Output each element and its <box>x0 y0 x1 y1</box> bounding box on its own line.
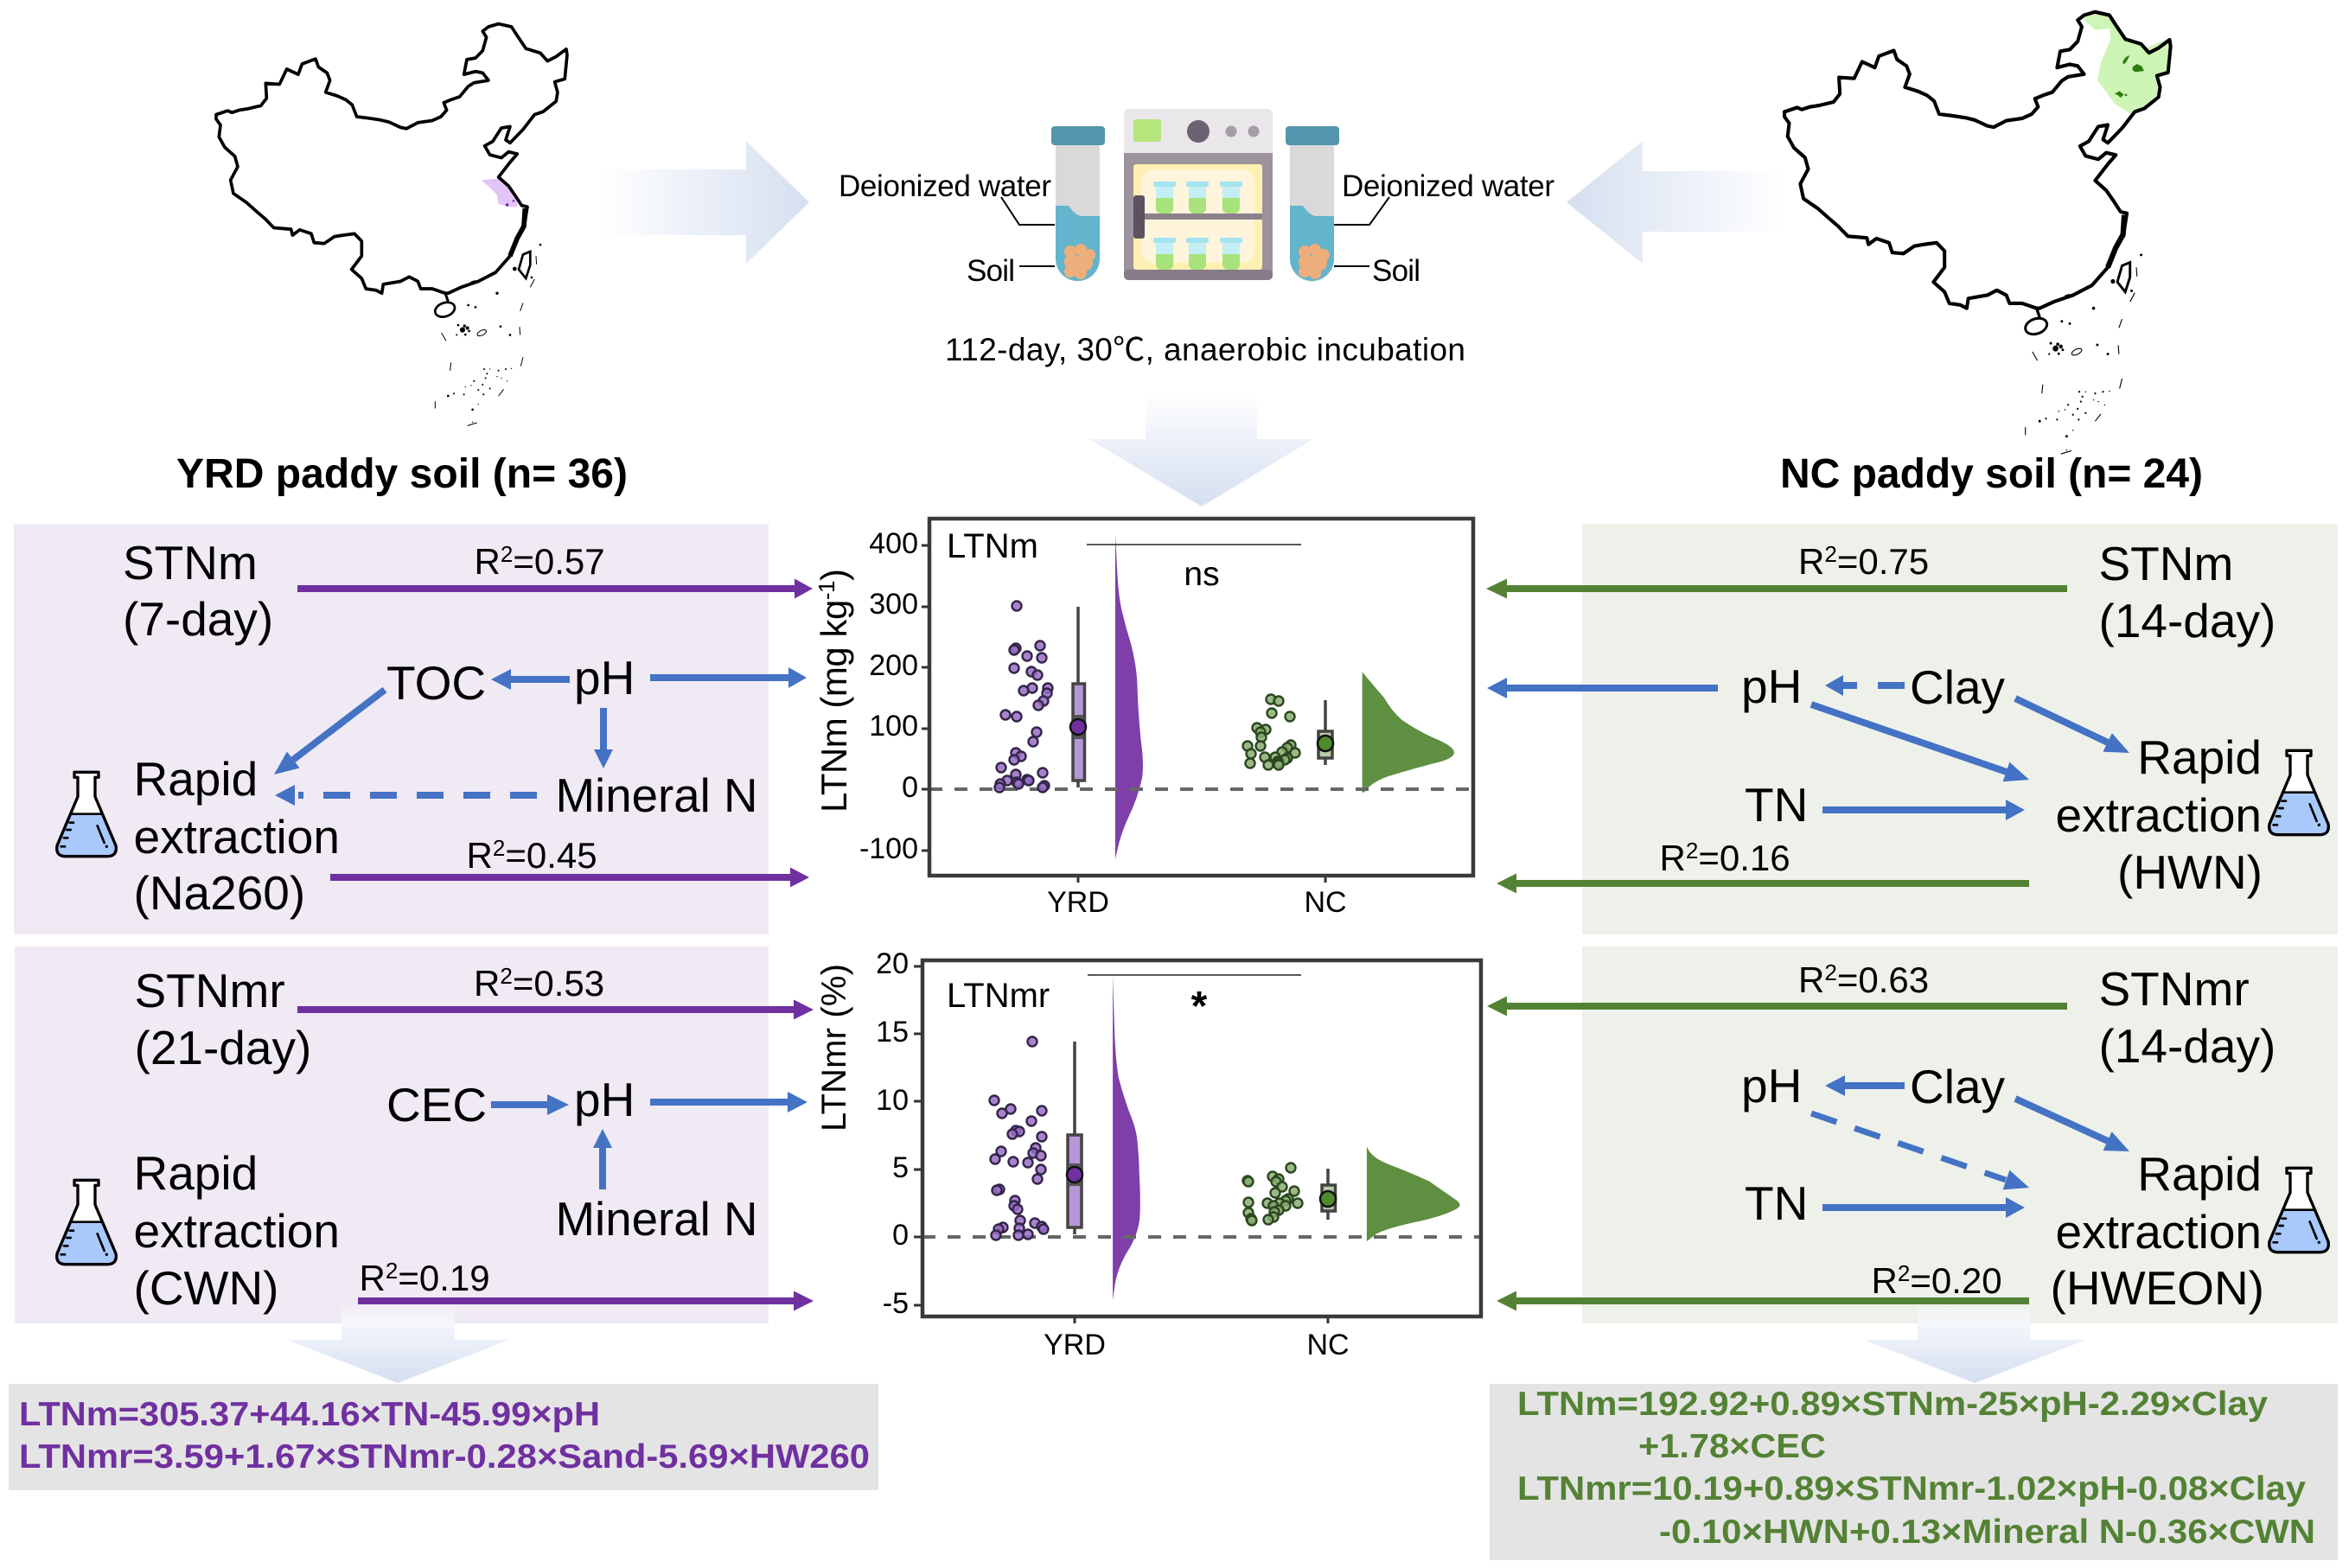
panel: NC STNmr path <box>1487 947 2338 1323</box>
arrow: STNmr to LTNmr <box>1487 996 2067 1017</box>
arrow: incubation to charts <box>1089 392 1313 507</box>
text: R2 0.45: 2 <box>493 835 505 861</box>
arrow: Clay to pH <box>1825 1075 1905 1096</box>
arrow: pH to rapid extraction <box>1811 704 2029 781</box>
text: R2 0.16: 2 <box>1686 838 1698 864</box>
text: STNmr 21-day: (21-day) <box>135 1021 311 1074</box>
text: R2 0.63: R <box>1798 959 1824 1000</box>
x labels: YRD <box>1047 886 1109 919</box>
text: STNmr 21-day <box>135 964 311 1074</box>
text: Mineral N: Mineral N <box>555 1192 757 1246</box>
significance label: ns <box>1184 556 1220 593</box>
map: China with YRD region <box>216 24 567 425</box>
label: deionized water right: Deionized water <box>1342 169 1554 203</box>
box: NC <box>1320 1169 1336 1220</box>
text: rapid extraction HWEON <box>2051 1147 2264 1315</box>
heading: YRD paddy soil: YRD paddy soil (n= 36) <box>176 451 628 497</box>
y tick labels: 0 <box>892 1219 909 1252</box>
text: pH: pH <box>1741 660 1802 713</box>
label: incubation conditions: 112-day, 30℃, anaerobic incubation <box>945 332 1465 367</box>
arrow: rapid extraction to LTNmr <box>358 1291 814 1310</box>
half violin: NC <box>1367 1146 1460 1241</box>
frame <box>929 519 1473 876</box>
icon: incubator <box>1124 109 1273 280</box>
arrow: YRD soil to incubation <box>599 141 809 264</box>
text: R2 0.57: =0.57 <box>513 541 605 582</box>
text: pH: pH <box>574 651 635 704</box>
y tick labels: -100 <box>859 832 918 865</box>
arrow: NC soil to incubation <box>1567 141 1783 264</box>
text: R2 0.20: 2 <box>1898 1260 1910 1286</box>
arrow: STNm to LTNm <box>1486 579 2067 598</box>
points: YRD <box>994 602 1053 792</box>
significance bracket <box>1088 974 1301 976</box>
arrow: TN to rapid extraction <box>1822 1197 2025 1218</box>
arrow: STNm to LTNm <box>297 579 813 598</box>
axis title: -1 <box>814 581 839 600</box>
map: China with NC region <box>1784 12 2171 454</box>
y tick labels: -5 <box>883 1287 909 1320</box>
text: TOC: TOC <box>386 656 486 710</box>
box: YRD <box>1067 1042 1082 1234</box>
text: rapid extraction HWN: Rapid <box>2137 730 2262 784</box>
text: pH: pH <box>1741 1059 1802 1112</box>
text: R2 0.75: 2 <box>1824 541 1837 567</box>
text: R2 0.63: 2 <box>1824 959 1837 985</box>
arrow: YRD to formula <box>287 1303 509 1383</box>
text: rapid extraction HWN <box>2056 730 2263 899</box>
box: YRD <box>1070 607 1086 787</box>
chart: LTNmr raincloud <box>815 947 1481 1361</box>
arrow: rapid extraction to LTNmr <box>1497 1291 2029 1310</box>
text: rapid extraction CWN <box>133 1146 340 1315</box>
x labels: NC <box>1304 886 1347 919</box>
text: rapid extraction CWN: Rapid <box>133 1146 258 1200</box>
text: R2 0.75: =0.75 <box>1837 541 1929 582</box>
arrow: TN to rapid extraction <box>1822 800 2025 820</box>
label: deionized water left: Deionized water <box>839 169 1051 203</box>
label: soil right: Soil <box>1372 254 1420 288</box>
y tick labels: 100 <box>869 710 918 743</box>
icon: left soil tube <box>1051 126 1105 282</box>
panel: YRD regression formulas: LTNm=305.37+44.16×TN-45.99×pH <box>19 1396 600 1433</box>
y tick labels <box>859 527 918 865</box>
text: STNmr 14-day: (14-day) <box>2099 1019 2276 1073</box>
panel: NC regression formulas: LTNm=192.92+0.89×STNm-25×pH-2.29×Clay <box>1517 1386 2268 1423</box>
text: R2 0.57: 2 <box>501 541 513 567</box>
zero reference line <box>929 787 1473 791</box>
points: YRD <box>989 1037 1048 1240</box>
highlighted NC provinces <box>2082 12 2169 116</box>
panel: NC regression formulas <box>1490 1384 2338 1560</box>
text: rapid extraction Na260: extraction <box>133 810 340 864</box>
points: NC <box>1243 1163 1302 1226</box>
arrow: pH to LTNmr <box>650 1092 807 1112</box>
arrow: CEC to pH <box>491 1094 569 1115</box>
text: rapid extraction CWN: extraction <box>133 1204 340 1258</box>
panel: YRD STNmr path <box>15 947 814 1323</box>
arrow: pH to LTNm <box>650 667 807 688</box>
panel: YRD regression formulas: LTNmr=3.59+1.67×STNmr-0.28×Sand-5.69×HW260 <box>19 1438 870 1476</box>
points: NC <box>1243 695 1300 769</box>
leader: water left <box>1001 197 1055 225</box>
icon: right soil tube <box>1286 126 1339 282</box>
text: rapid extraction HWEON: extraction <box>2056 1205 2262 1259</box>
text: Clay: Clay <box>1910 660 2006 714</box>
arrow: pH to LTNm <box>1487 678 1718 698</box>
text: R2 0.20: R <box>1871 1260 1898 1301</box>
arrow: Clay to rapid extraction <box>2015 698 2129 753</box>
arrow: pH dashed to rapid extraction <box>1811 1113 2029 1189</box>
y tick labels: 20 <box>876 947 909 980</box>
text: R2 0.53: =0.53 <box>513 963 604 1004</box>
arrow: Clay to rapid extraction <box>2015 1099 2129 1151</box>
text: R2 0.19: 2 <box>386 1258 398 1284</box>
text: STNm 14-day: STNm <box>2099 537 2233 590</box>
significance label: * <box>1191 984 1208 1029</box>
y tick labels: 15 <box>876 1016 909 1049</box>
text: rapid extraction HWEON: (HWEON) <box>2051 1261 2264 1315</box>
text: R2 0.63: =0.63 <box>1837 959 1929 1000</box>
arrow: rapid extraction to LTNm <box>330 868 809 887</box>
text: STNmr 21-day: STNmr <box>135 964 285 1017</box>
x labels: NC <box>1306 1329 1350 1361</box>
text: STNm 7-day <box>123 536 273 646</box>
y tick labels: 400 <box>869 527 918 560</box>
panel: NC regression formulas: +1.78×CEC <box>1638 1428 1826 1465</box>
text: rapid extraction HWN: extraction <box>2056 788 2262 842</box>
x labels: YRD <box>1044 1329 1106 1361</box>
text: R2 0.53: R <box>474 963 500 1004</box>
icon: flask <box>57 772 116 857</box>
x labels <box>1047 886 1347 919</box>
half violin: YRD <box>1113 975 1140 1300</box>
text: R2 0.16: =0.16 <box>1698 838 1790 878</box>
text: CEC: CEC <box>386 1078 487 1131</box>
text: rapid extraction HWN: (HWN) <box>2117 845 2263 899</box>
leader: soil right <box>1334 265 1369 267</box>
panel label: LTNm <box>947 527 1038 565</box>
panel: NC regression formulas: LTNmr=10.19+0.89×STNmr-1.02×pH-0.08×Clay <box>1517 1470 2306 1507</box>
text: pH: pH <box>574 1073 635 1126</box>
text: STNmr 14-day: STNmr <box>2099 962 2250 1016</box>
panel label: LTNmr <box>947 977 1050 1015</box>
text: R2 0.20: =0.20 <box>1910 1260 2002 1301</box>
text: Mineral N: Mineral N <box>555 768 757 822</box>
y tick labels: 200 <box>869 649 918 682</box>
leader: soil left <box>1019 265 1055 267</box>
x labels <box>1044 1329 1350 1361</box>
text: rapid extraction Na260 <box>133 752 340 920</box>
arrow: STNmr to LTNmr <box>297 999 814 1020</box>
arrow: pH to TOC <box>491 669 570 690</box>
panel: NC regression formulas: -0.10×HWN+0.13×Mineral N-0.36×CWN <box>1659 1514 2315 1551</box>
text: R2 0.45: =0.45 <box>505 835 597 876</box>
text: R2 0.19: R <box>360 1258 386 1298</box>
text: TN: TN <box>1745 1176 1808 1230</box>
y tick labels: 300 <box>869 588 918 621</box>
text: R2 0.57: R <box>474 541 501 582</box>
text: R2 0.16: R <box>1660 838 1686 878</box>
axis title: ) <box>814 569 854 581</box>
axis title: LTNmr (%) <box>815 964 853 1131</box>
box: NC <box>1318 700 1333 765</box>
text: Clay: Clay <box>1910 1060 2006 1113</box>
text: STNm 7-day: STNm <box>123 536 258 590</box>
zero reference line <box>922 1235 1481 1239</box>
text: TN: TN <box>1745 778 1808 832</box>
text: STNm 14-day <box>2099 537 2276 647</box>
arrow: rapid extraction to LTNm <box>1497 873 2029 894</box>
arrow: TOC to rapid extraction <box>274 690 385 774</box>
text: STNm 14-day: (14-day) <box>2099 594 2276 647</box>
y tick labels <box>876 947 909 1320</box>
panel: YRD STNm path <box>14 524 813 934</box>
icon: flask <box>2269 1168 2328 1252</box>
significance bracket <box>1087 544 1301 545</box>
heading: NC paddy soil: NC paddy soil (n= 24) <box>1780 451 2203 497</box>
text: rapid extraction HWEON: Rapid <box>2137 1147 2262 1201</box>
arrow: Mineral N dashed to rapid extraction <box>275 785 537 806</box>
text: rapid extraction Na260: Rapid <box>133 752 258 806</box>
text: R2 0.45: R <box>467 835 493 876</box>
axis title: LTNm (mg kg <box>814 600 854 813</box>
arrow: pH to Mineral N <box>594 708 613 768</box>
icon: flask <box>57 1180 116 1265</box>
label: soil left: Soil <box>967 254 1015 288</box>
text: rapid extraction CWN: (CWN) <box>133 1261 278 1315</box>
leader: water right <box>1334 197 1389 225</box>
panel: YRD regression formulas <box>9 1384 878 1490</box>
text: R2 0.19: =0.19 <box>398 1258 490 1298</box>
icon: flask <box>2269 750 2328 835</box>
frame <box>922 960 1481 1316</box>
text: rapid extraction Na260: (Na260) <box>133 866 305 920</box>
text: R2 0.75: R <box>1798 541 1824 582</box>
text: STNm 7-day: (7-day) <box>123 592 273 646</box>
highlighted YRD province <box>482 179 517 207</box>
y tick labels: 10 <box>876 1084 909 1117</box>
chart: LTNm raincloud <box>814 519 1473 919</box>
y tick labels: 0 <box>902 771 918 804</box>
half violin: NC <box>1363 672 1454 793</box>
panel: NC STNm path <box>1486 524 2338 934</box>
arrow: NC to formula <box>1864 1303 2086 1383</box>
arrow: Clay dashed to pH <box>1825 675 1905 696</box>
y tick labels: 5 <box>892 1151 909 1184</box>
half violin: YRD <box>1115 534 1143 859</box>
arrow: Mineral N to pH <box>593 1129 612 1189</box>
text: R2 0.53: 2 <box>500 963 513 989</box>
text: STNmr 14-day <box>2099 962 2276 1073</box>
